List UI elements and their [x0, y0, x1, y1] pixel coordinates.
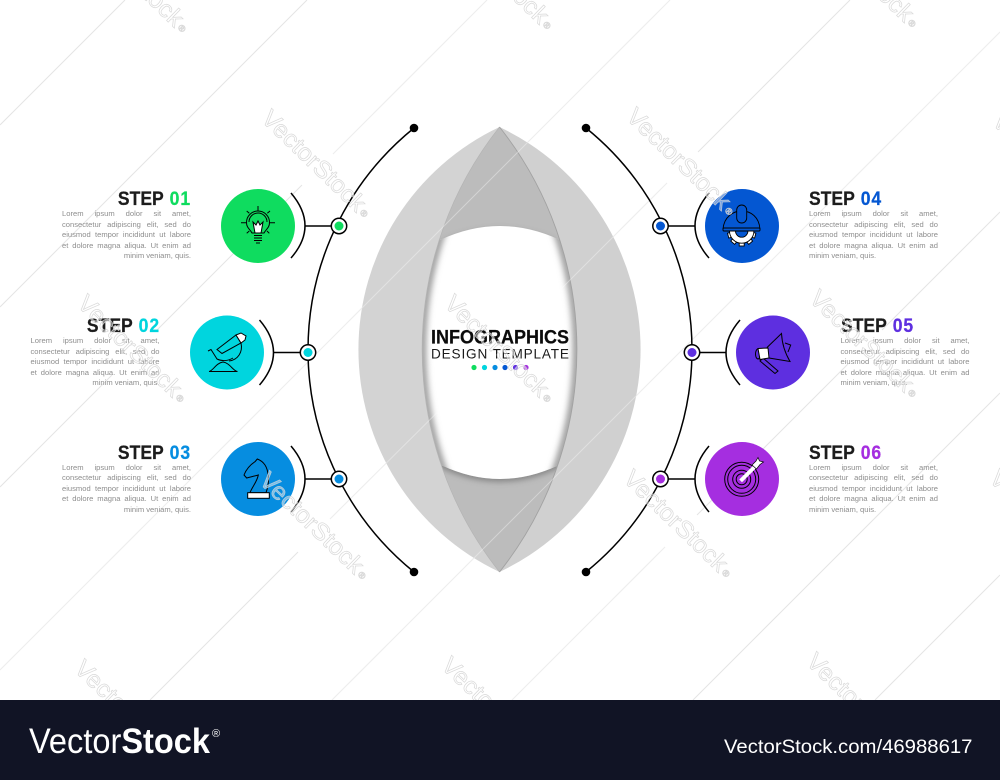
center title [431, 328, 569, 370]
outer left band [358, 127, 500, 572]
step 02 body [30, 336, 160, 387]
step 03 heading: STEP 03 [118, 442, 191, 464]
step 03 text [62, 442, 191, 514]
watermarks: ® [720, 567, 732, 580]
footer image id: VectorStock.com/46988617 [724, 736, 972, 758]
watermarks: ® [538, 754, 550, 767]
center title: DESIGN TEMPLATE [431, 346, 569, 362]
step 01 body [62, 209, 191, 260]
step 03 body: minim veniam, quis. [124, 505, 191, 514]
step 05 body: eiusmod tempor incididunt ut labore [840, 357, 970, 366]
watermarks: ® [723, 205, 735, 218]
step 05 marker [684, 316, 810, 390]
footer logo: VectorStock [29, 722, 210, 761]
watermarks: VectorStock [69, 655, 180, 763]
watermarks: ® [176, 22, 188, 35]
watermarks: ® [356, 569, 368, 582]
step 01 marker [221, 189, 347, 263]
watermarks: ® [174, 392, 186, 405]
step 05 heading: STEP 05 [840, 315, 914, 337]
step 03 marker [221, 442, 347, 516]
watermarks: VectorStock [804, 285, 915, 393]
step 03 body [62, 462, 191, 514]
step 05 body: et dolore magna aliqua. Ut enim ad [840, 368, 970, 377]
footer bar: ® [212, 728, 220, 740]
step 01 heading: STEP 01 [118, 188, 191, 210]
step 05 text [840, 315, 970, 387]
icon: microscope [208, 333, 246, 372]
step 03 body: et dolore magna aliqua. Ut enim ad [62, 494, 191, 503]
icon: light bulb [241, 206, 275, 243]
step 02 body: eiusmod tempor incididunt ut labore [30, 357, 160, 366]
watermarks: ® [903, 750, 915, 763]
step 06 heading: STEP 06 [809, 442, 882, 464]
right connector arc [582, 124, 692, 576]
step 04 body: consectetur adipiscing elit, sed do [809, 220, 938, 229]
watermarks: ® [906, 17, 918, 30]
step 01 body: consectetur adipiscing elit, sed do [62, 220, 191, 229]
step 02 body: et dolore magna aliqua. Ut enim ad [30, 368, 160, 377]
step 06 body: Lorem ipsum dolor sit amet, [809, 462, 938, 472]
step 06 body: consectetur adipiscing elit, sed do [809, 473, 938, 482]
step 02 marker [190, 316, 316, 390]
step 06 body: et dolore magna aliqua. Ut enim ad [809, 494, 938, 503]
step 02 body: Lorem ipsum dolor sit amet, [30, 336, 160, 345]
step 02 body: minim veniam, quis. [92, 378, 160, 387]
icon: target and dart [725, 458, 764, 496]
step 06 text [809, 442, 938, 514]
step 01 body: Lorem ipsum dolor sit amet, [62, 209, 191, 218]
step 04 body: et dolore magna aliqua. Ut enim ad [809, 241, 938, 250]
step 05 body [840, 336, 970, 387]
watermarks: ® [171, 757, 183, 770]
step 03 body: eiusmod tempor incididunt ut labore [62, 484, 191, 493]
watermarks: ® [541, 19, 553, 32]
step 05 body: consectetur adipiscing elit, sed do [840, 347, 970, 356]
step 01 body: minim veniam, quis. [124, 251, 191, 260]
watermarks: VectorStock [436, 652, 547, 760]
step 06 body: minim veniam, quis. [809, 505, 876, 514]
icon: helmet and gear [723, 205, 760, 246]
watermarks: ® [541, 392, 553, 405]
center title: INFOGRAPHICS [431, 328, 569, 348]
step 06 marker [653, 442, 779, 516]
step 06 body: eiusmod tempor incididunt ut labore [809, 484, 938, 493]
step 01 body: et dolore magna aliqua. Ut enim ad [62, 241, 191, 250]
step 04 body: minim veniam, quis. [809, 251, 876, 260]
step 06 body [809, 462, 938, 514]
step 01 text [62, 188, 191, 260]
watermarks: VectorStock [621, 103, 732, 211]
watermarks: VectorStock [801, 648, 912, 756]
footer bar [0, 700, 1000, 780]
step 05 body: Lorem ipsum dolor sit amet, [840, 336, 970, 345]
watermarks: VectorStock [439, 290, 550, 398]
central lens shape [358, 127, 641, 572]
icon: chess knight [244, 459, 269, 498]
step 03 body: consectetur adipiscing elit, sed do [62, 473, 191, 482]
outer right band [500, 127, 641, 572]
step 03 body: Lorem ipsum dolor sit amet, [62, 462, 191, 472]
white centre panel [422, 226, 576, 484]
step 05 body: minim veniam, quis. [840, 378, 908, 387]
step 02 text [30, 315, 160, 387]
inner dark wedge [422, 127, 577, 572]
watermarks: VectorStock [618, 465, 729, 573]
step 04 heading: STEP 04 [809, 188, 882, 210]
watermarks: ® [358, 207, 370, 220]
step 02 body: consectetur adipiscing elit, sed do [30, 347, 160, 356]
step 04 text [809, 188, 938, 260]
step 02 heading: STEP 02 [86, 315, 160, 337]
step 04 body: eiusmod tempor incididunt ut labore [809, 230, 938, 239]
icon: megaphone [756, 334, 791, 374]
watermarks: VectorStock [254, 467, 365, 575]
watermarks: VectorStock [72, 290, 183, 398]
left connector arc [308, 124, 418, 576]
step 04 body [809, 209, 938, 260]
step 04 body: Lorem ipsum dolor sit amet, [809, 209, 938, 218]
step 04 marker [653, 189, 779, 263]
watermarks: ® [906, 387, 918, 400]
watermarks: VectorStock [256, 105, 367, 213]
step 01 body: eiusmod tempor incididunt ut labore [62, 230, 191, 239]
